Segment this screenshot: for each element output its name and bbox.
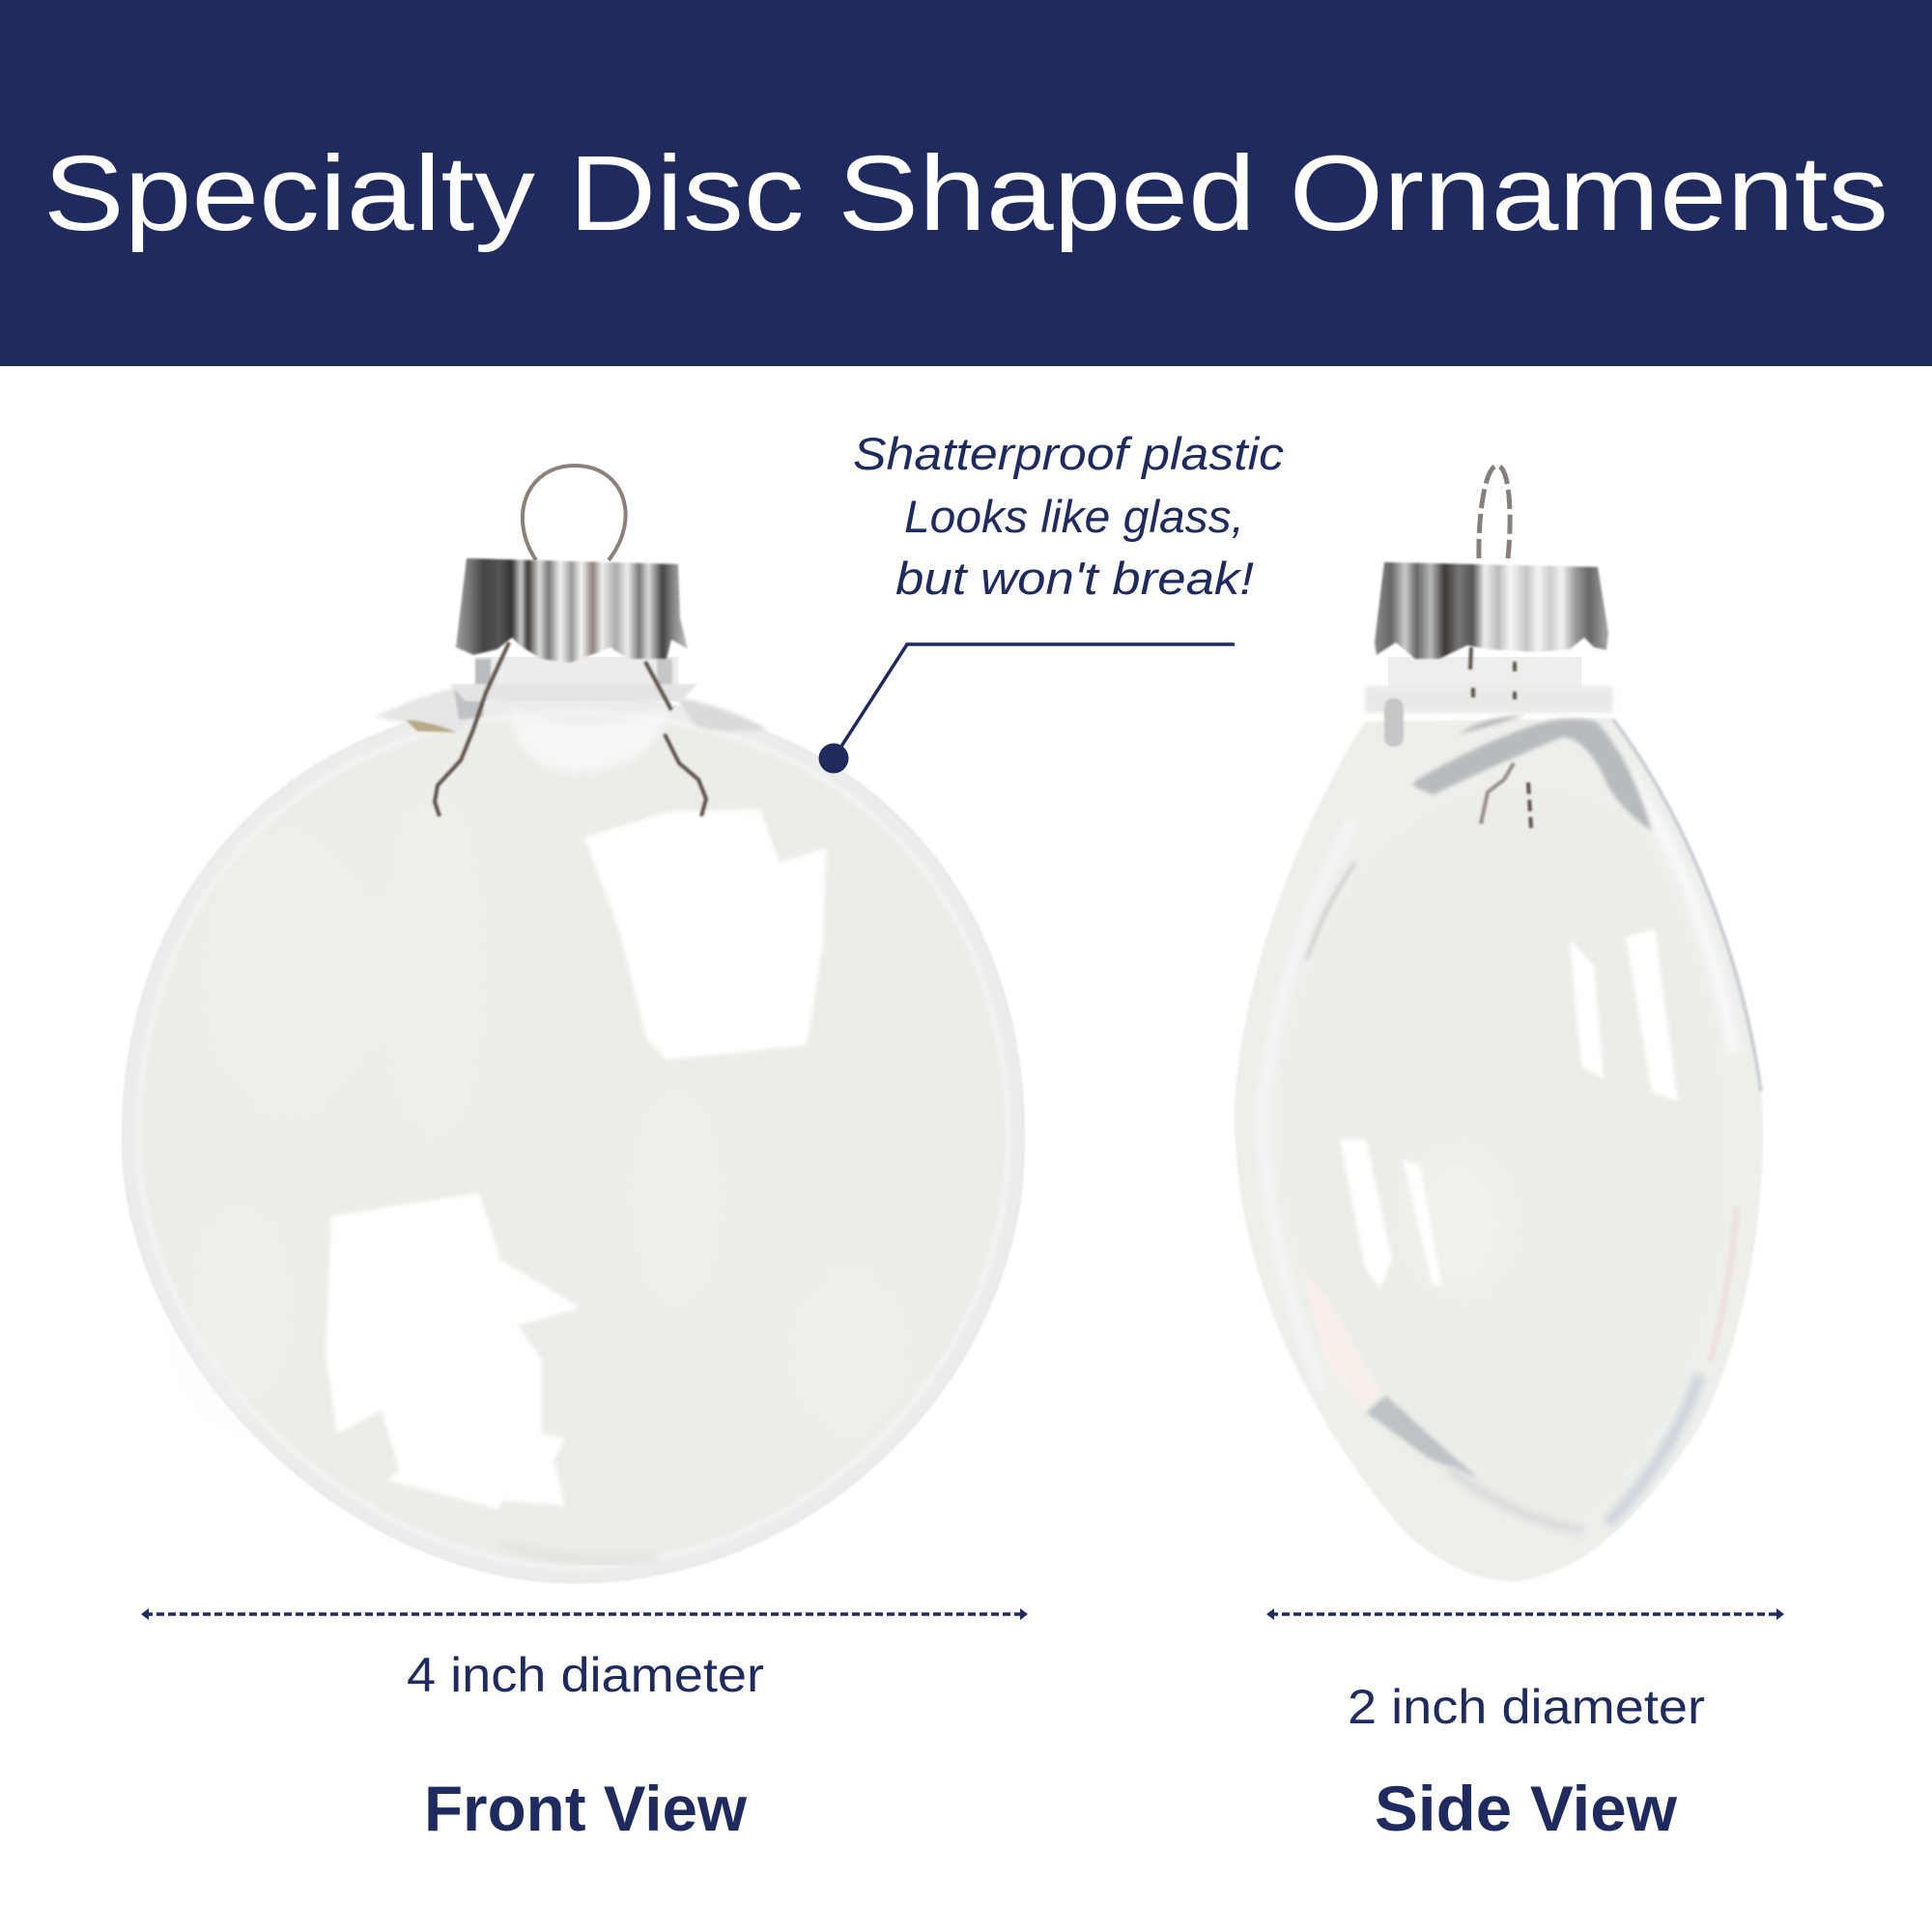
side iridescent lower glare [1302, 1208, 1737, 1531]
side neck and collar [1365, 657, 1613, 747]
callout text [853, 428, 1284, 604]
side metal cap [1375, 562, 1608, 659]
shoulder glints [374, 688, 768, 773]
side hanger loop [1479, 466, 1510, 558]
lower reflection [326, 1193, 581, 1509]
wire prongs [435, 642, 706, 816]
disc body [123, 697, 1024, 1582]
title: Specialty Disc Shaped Ornaments [43, 134, 1889, 253]
callout text: but won't break! [895, 553, 1254, 604]
callout text: Shatterproof plastic [853, 428, 1284, 479]
front dimension arrow [141, 1608, 1028, 1620]
callout dot [819, 744, 848, 773]
label: side view: Side View [1375, 1773, 1678, 1844]
inner fold highlights [1412, 715, 1652, 831]
side wire prongs [1470, 647, 1531, 828]
callout leader line [834, 644, 1235, 758]
side view ornament [1235, 466, 1763, 1581]
header banner [0, 0, 1932, 366]
metal cap [456, 558, 688, 663]
upper reflection [584, 810, 826, 1060]
callout text: Looks like glass, [904, 491, 1244, 542]
side dimension arrow [1266, 1608, 1784, 1620]
front view ornament [123, 466, 1024, 1582]
label: 4 inch diameter: 4 inch diameter [407, 1648, 764, 1702]
label: 2 inch diameter: 2 inch diameter [1348, 1680, 1705, 1734]
brushed mottling [193, 782, 908, 1439]
side body [1235, 718, 1763, 1581]
label: front view: Front View [424, 1773, 748, 1844]
neck and collar [449, 657, 697, 701]
side reflections [1340, 929, 1678, 1288]
callout: shatterproof plastic [819, 428, 1284, 773]
hanger ring [523, 466, 626, 560]
